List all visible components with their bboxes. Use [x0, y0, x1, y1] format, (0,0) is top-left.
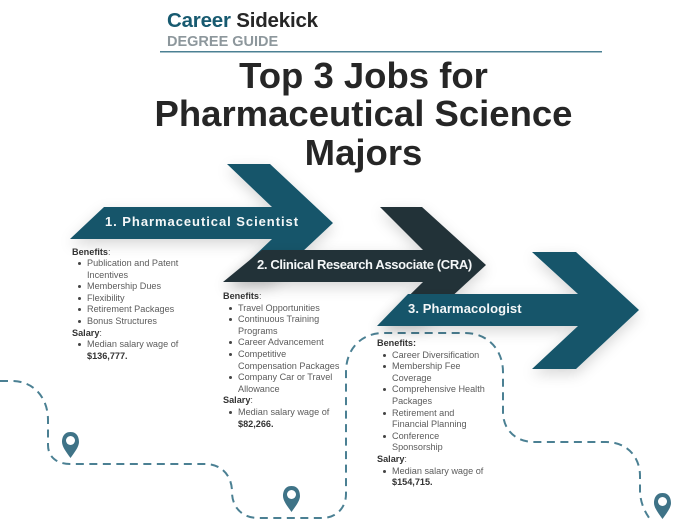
- text block: pharmacologist: Median salary wage of: [392, 466, 483, 476]
- arrow 3: [377, 252, 639, 369]
- text block: clinical research associate: Company Car or Travel: [238, 372, 332, 382]
- text block: pharmaceutical scientist: Benefits: Salary:: [72, 246, 111, 338]
- header rule: [160, 51, 602, 52]
- arrow 2: [223, 207, 486, 324]
- icon: map pin 3: [654, 493, 671, 519]
- text block: pharmaceutical scientist: Membership Dues: [87, 281, 161, 291]
- text block: pharmacologist: Coverage: [392, 373, 432, 383]
- text block: pharmaceutical scientist: Flexibility: [87, 293, 125, 303]
- text block: clinical research associate: Continuous Training: [238, 314, 319, 324]
- title: Pharmaceutical Science: [155, 93, 572, 134]
- text block: clinical research associate: Compensation Packages: [238, 361, 339, 371]
- text block: clinical research associate: $82,266.: [238, 419, 274, 429]
- text block: pharmacologist: Financial Planning: [392, 419, 467, 429]
- text block: pharmacologist: Sponsorship: [392, 442, 443, 452]
- text block: pharmaceutical scientist: $136,777.: [87, 351, 128, 361]
- text block: pharmacologist: Packages: [392, 396, 432, 406]
- text block: pharmaceutical scientist: Incentives: [87, 270, 128, 280]
- text block: clinical research associate: Benefits: Salary:: [223, 291, 262, 405]
- text block: pharmacologist: Conference: [392, 431, 439, 441]
- arrow 1: [70, 164, 333, 282]
- text block: pharmaceutical scientist: [72, 246, 178, 361]
- text block: clinical research associate: Career Advancement: [238, 337, 324, 347]
- text block: pharmaceutical scientist: Retirement Packages: [87, 304, 174, 314]
- arrow label 1: 1. Pharmaceutical Scientist: [105, 214, 299, 229]
- degree guide label: DEGREE GUIDE: [167, 34, 278, 50]
- text block: pharmacologist: Benefits: Salary:: [377, 338, 416, 464]
- text block: clinical research associate: Median salary wage of: [238, 407, 329, 417]
- text block: pharmacologist: Career Diversification: [392, 350, 479, 360]
- text block: pharmacologist: [377, 338, 485, 487]
- title: Majors: [305, 132, 422, 172]
- brand name: Career Sidekick: [167, 8, 318, 32]
- text block: clinical research associate: Allowance: [238, 384, 280, 394]
- text block: clinical research associate: Competitive: [238, 349, 286, 359]
- text block: pharmacologist: Membership Fee: [392, 361, 460, 371]
- text block: pharmaceutical scientist: Bonus Structures: [87, 316, 157, 326]
- text block: pharmaceutical scientist: Publication and Patent: [87, 258, 178, 268]
- text block: clinical research associate: [223, 291, 340, 429]
- text block: pharmacologist: $154,715.: [392, 477, 433, 487]
- arrow label 2: 2. Clinical Research Associate (CRA): [257, 257, 472, 272]
- text block: pharmacologist: Retirement and: [392, 408, 454, 418]
- text block: clinical research associate: Travel Opportunities: [238, 303, 320, 313]
- icon: map pin 2: [283, 486, 300, 512]
- text block: pharmaceutical scientist: Median salary wage of: [87, 339, 178, 349]
- text block: clinical research associate: Programs: [238, 326, 278, 336]
- route: dashed path: [0, 333, 652, 522]
- title: [155, 54, 572, 172]
- text block: pharmacologist: Comprehensive Health: [392, 384, 485, 394]
- arrow label 3: 3. Pharmacologist: [408, 301, 522, 316]
- icon: map pin 1: [62, 432, 79, 458]
- title: Top 3 Jobs for: [239, 54, 488, 96]
